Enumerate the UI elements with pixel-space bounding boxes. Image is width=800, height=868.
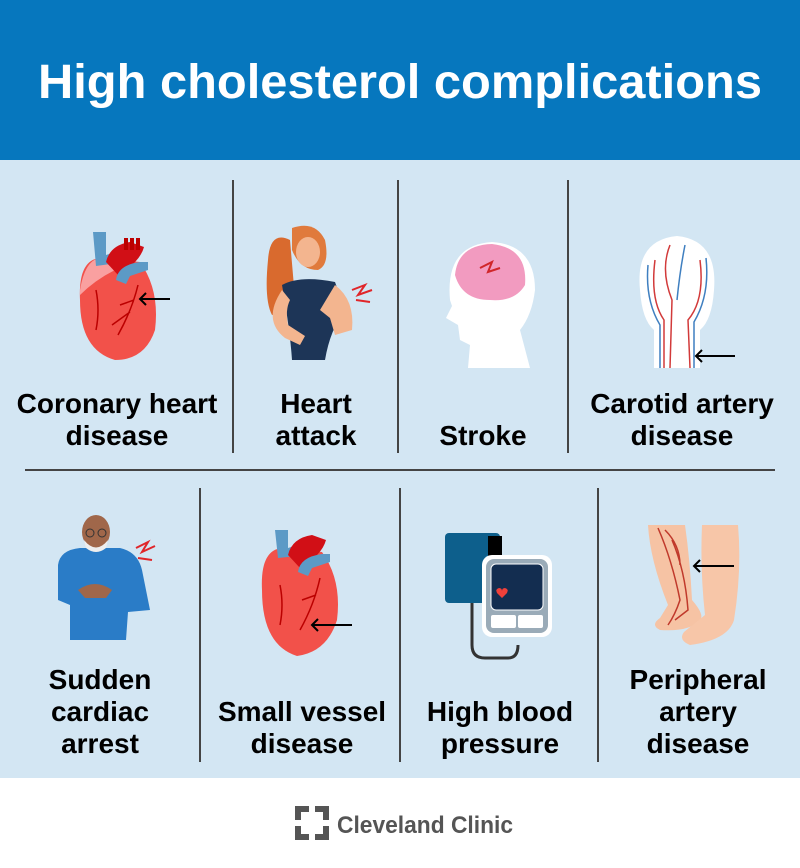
- label: small vessel disease: Small vessel: [218, 696, 386, 727]
- icon: heart small vessel: [262, 530, 352, 656]
- label: peripheral artery disease: disease: [647, 728, 749, 759]
- label: peripheral artery disease: Peripheral: [630, 664, 766, 695]
- label: carotid artery disease: disease: [631, 420, 733, 451]
- label: sudden cardiac arrest: [49, 664, 151, 759]
- label: carotid artery disease: [590, 388, 774, 451]
- label: coronary heart disease: Coronary heart: [17, 388, 217, 419]
- icon: blood pressure monitor: [445, 533, 552, 658]
- label: small vessel disease: [218, 696, 386, 759]
- icon: head with brain: [446, 242, 535, 368]
- label: heart attack: attack: [276, 420, 357, 451]
- icon: legs peripheral artery: [648, 525, 739, 645]
- label: high blood pressure: pressure: [441, 728, 559, 759]
- logo: Cleveland Clinic: Cleveland Clinic: [337, 812, 513, 839]
- label: stroke: Stroke: [439, 420, 527, 451]
- label: sudden cardiac arrest: arrest: [61, 728, 139, 759]
- label: coronary heart disease: [17, 388, 217, 451]
- logo: Cleveland Clinic: [295, 806, 513, 840]
- icon: heart coronary: [80, 232, 170, 360]
- label: heart attack: Heart: [280, 388, 352, 419]
- arrow: [140, 293, 170, 305]
- icon: head with carotid: [639, 236, 735, 368]
- body panel: [0, 160, 800, 778]
- icon: man cardiac arrest: [58, 515, 155, 640]
- label: peripheral artery disease: [630, 664, 766, 759]
- icon: woman heart attack: [267, 226, 372, 360]
- label: small vessel disease: disease: [251, 728, 353, 759]
- title: High cholesterol complications: [38, 56, 762, 109]
- label: heart attack: [276, 388, 357, 451]
- label: sudden cardiac arrest: Sudden: [49, 664, 151, 695]
- header band: [0, 0, 800, 160]
- label: sudden cardiac arrest: cardiac: [51, 696, 149, 727]
- label: high blood pressure: High blood: [427, 696, 573, 727]
- label: carotid artery disease: Carotid artery: [590, 388, 774, 419]
- label: coronary heart disease: disease: [66, 420, 168, 451]
- label: peripheral artery disease: artery: [659, 696, 737, 727]
- label: high blood pressure: [427, 696, 573, 759]
